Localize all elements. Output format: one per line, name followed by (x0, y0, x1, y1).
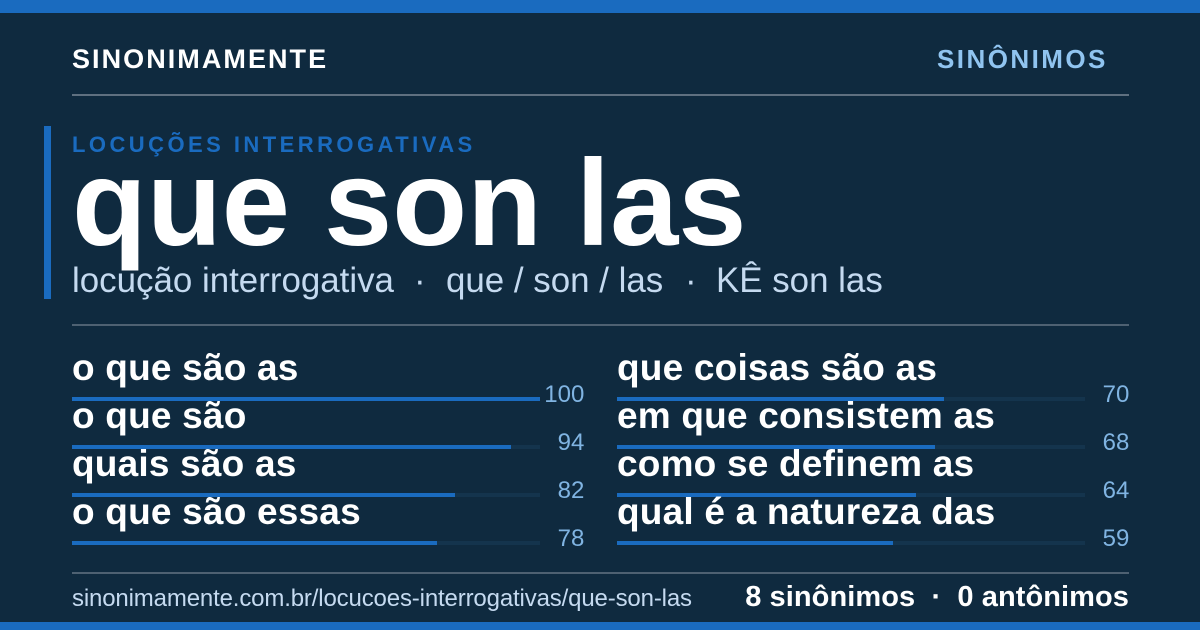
item: qual é a natureza das (617, 491, 1129, 552)
item: o que são (72, 395, 584, 456)
item: o que são: 94 (558, 429, 584, 456)
source url: sinonimamente.com.br/locucoes-interrogativas/que-son-las (72, 585, 692, 612)
item: quais são as (72, 443, 584, 504)
subtitle (72, 261, 883, 300)
item: como se definem as: como se definem as (617, 443, 974, 484)
item: o que são essas: 78 (558, 525, 584, 552)
top bar (0, 0, 1200, 13)
right column list (617, 347, 1129, 552)
item: em que consistem as: 68 (1103, 429, 1129, 456)
subtitle: KÊ son las (716, 261, 883, 300)
brand: SINONIMAMENTE (72, 44, 328, 74)
item: o que são essas: o que são essas (72, 491, 361, 532)
subtitle: · (685, 261, 697, 300)
subtitle: · (414, 261, 426, 300)
item: qual é a natureza das: qual é a natureza das (617, 491, 995, 532)
bottom bar (0, 622, 1200, 630)
item: qual é a natureza das: 59 (1103, 525, 1129, 552)
category: LOCUÇÕES INTERROGATIVAS (72, 132, 476, 157)
item: que coisas são as (617, 347, 1129, 408)
item: como se definem as (617, 443, 1129, 504)
item: quais são as: 82 (558, 477, 584, 504)
left column list (72, 347, 584, 552)
accent bar (44, 126, 51, 299)
item: que coisas são as: 70 (1103, 381, 1129, 408)
item: em que consistem as: em que consistem as (617, 395, 995, 436)
item: o que são: o que são (72, 395, 246, 436)
title: que son las (72, 134, 746, 271)
item: em que consistem as (617, 395, 1129, 456)
item: que coisas são as: que coisas são as (617, 347, 937, 388)
item: o que são as: o que são as (72, 347, 299, 388)
item: o que são as (72, 347, 584, 408)
section label: SINÔNIMOS (937, 44, 1108, 74)
counts: 8 sinônimos · 0 antônimos (745, 581, 1129, 613)
subtitle: que / son / las (446, 261, 663, 300)
item: quais são as: quais são as (72, 443, 297, 484)
subtitle: locução interrogativa (72, 261, 394, 300)
item: como se definem as: 64 (1103, 477, 1129, 504)
item: o que são as: 100 (544, 381, 584, 408)
item: o que são essas (72, 491, 584, 552)
